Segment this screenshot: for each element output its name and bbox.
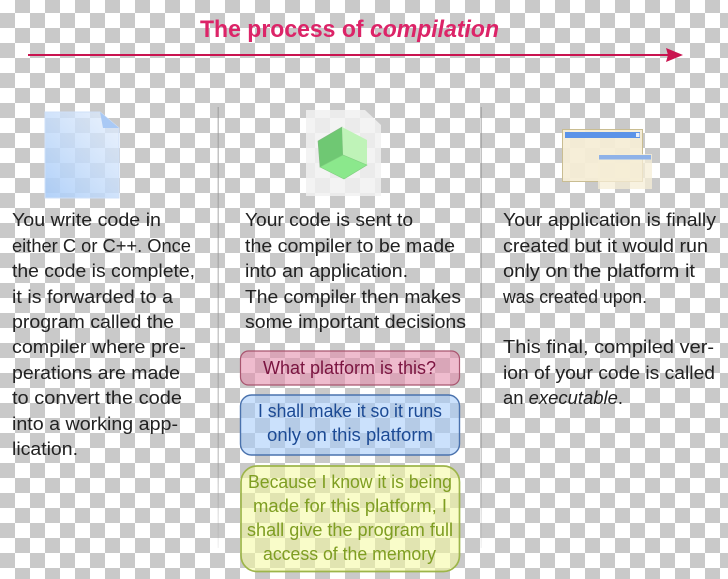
text block: compiler: The compiler then makes xyxy=(245,286,461,307)
arrow: process direction xyxy=(28,48,683,62)
text block: write code: lication. xyxy=(12,438,78,459)
text block: compiler: into an application. xyxy=(245,260,408,281)
text block: write code: compiler where pre- xyxy=(12,336,186,357)
text block: application xyxy=(502,209,717,408)
title: The process of compilation xyxy=(200,16,499,43)
text block: application: only on the platform it xyxy=(503,260,695,281)
text block: compiler: the compiler to be made xyxy=(245,235,455,256)
icon: source code document xyxy=(45,112,119,198)
callout: platform decision: only on this platform xyxy=(267,425,433,445)
icon: compiler cube xyxy=(306,110,381,196)
text block: write code xyxy=(12,209,195,459)
text block: write code: to convert the code xyxy=(12,387,182,408)
text block: compiler: some important decisions xyxy=(245,311,466,332)
callout: platform question xyxy=(240,351,460,385)
text block: write code: program called the xyxy=(12,311,174,332)
text block: application: created but it would run xyxy=(503,235,708,256)
text block: write code: into a working app- xyxy=(12,413,178,434)
text block: write code: perations are made xyxy=(12,362,180,383)
text block: write code: it is forwarded to a xyxy=(12,286,174,307)
callout: memory access: made for this platform, I xyxy=(253,496,447,516)
callout: platform decision xyxy=(240,395,460,455)
text block: application: ion of your code is called xyxy=(503,362,715,383)
text block: application: This final, compiled ver- xyxy=(503,336,714,357)
text block: write code: You write code in xyxy=(12,209,161,230)
text block: compiler xyxy=(245,209,466,332)
text block: application: Your application is finally xyxy=(503,209,717,230)
icon: application windows xyxy=(562,130,652,189)
text block: application: was created upon. xyxy=(502,286,647,307)
text block: write code: the code is complete, xyxy=(12,260,195,281)
callout: memory access: shall give the program full xyxy=(247,520,453,540)
callout: memory access: Because I know it is being xyxy=(248,472,452,492)
text block: compiler: Your code is sent to xyxy=(245,209,413,230)
text block: application: an executable. xyxy=(503,387,623,408)
callout: platform question: What platform is this? xyxy=(263,358,436,378)
text block: write code: either C or C++. Once xyxy=(12,235,191,256)
callout: memory access xyxy=(241,466,460,572)
callout: memory access: access of the memory xyxy=(263,544,436,564)
callout: platform decision: I shall make it so it runs xyxy=(258,401,442,421)
